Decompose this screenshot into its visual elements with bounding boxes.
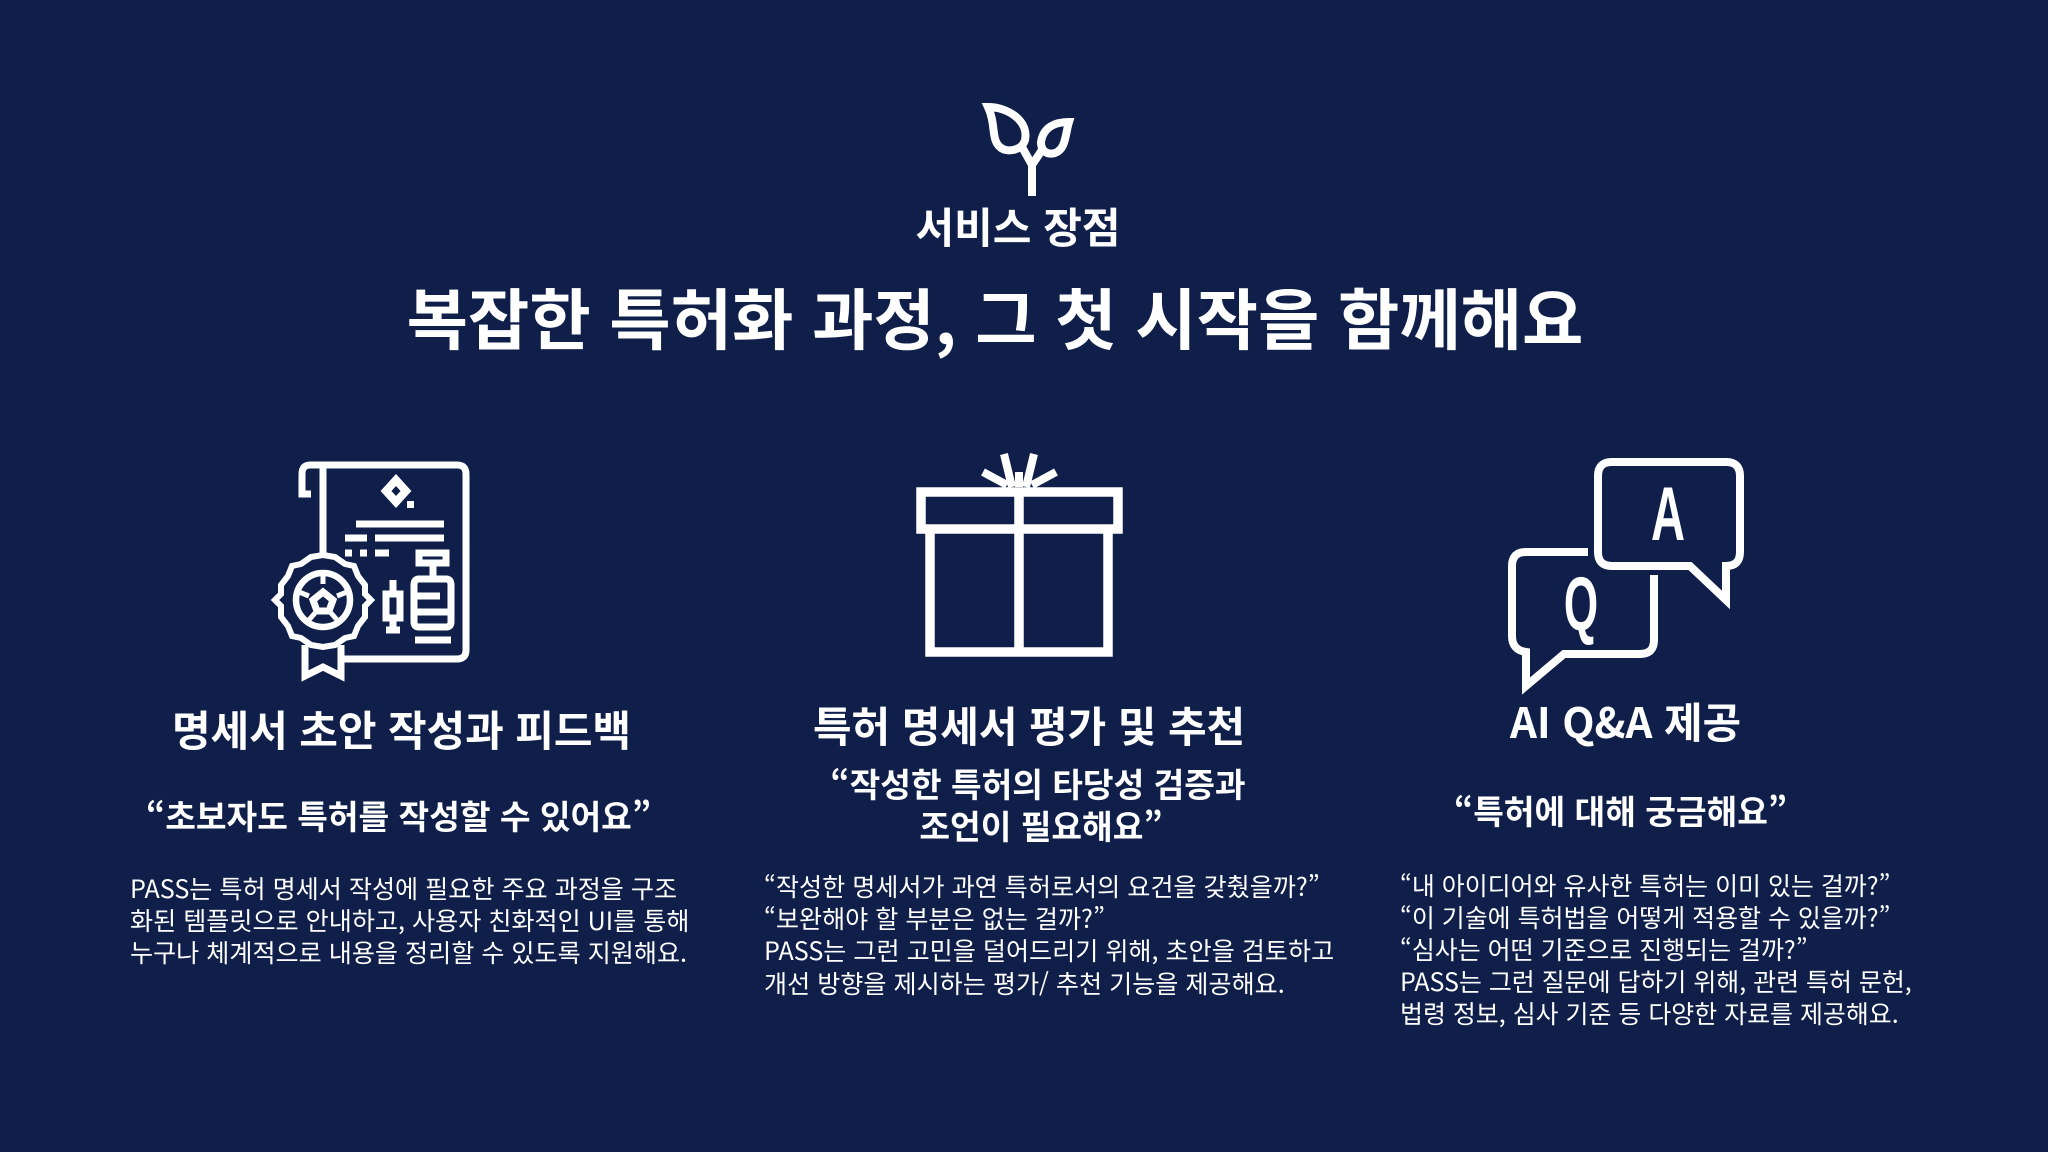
body text: evaluation: 개선 방향을 제시하는 평가/ 추천 기능을 제공해요. (764, 965, 1285, 1001)
body text: draft writing: PASS는 특허 명세서 작성에 필요한 주요 과정을 구조 (130, 870, 677, 906)
body text: AI Q&A: “이 기술에 특허법을 어떻게 적용할 수 있을까?” (1400, 899, 1890, 935)
quote: AI Q&A: “특허에 대해 궁금해요” (1454, 785, 1787, 834)
quote: draft writing: “초보자도 특허를 작성할 수 있어요” (146, 790, 651, 839)
quote: evaluation: 조언이 필요해요” (919, 800, 1163, 849)
icon: Q and A speech bubbles: Q (1564, 563, 1598, 647)
icon: sprout (982, 103, 1074, 196)
body text: AI Q&A: “내 아이디어와 유사한 특허는 이미 있는 걸까?” (1400, 867, 1890, 903)
body text: draft writing (130, 870, 689, 970)
panel: draft writing (130, 462, 689, 970)
heading: AI Q&A: AI Q&A 제공 (1510, 690, 1741, 751)
body text: AI Q&A: 법령 정보, 심사 기준 등 다양한 자료를 제공해요. (1400, 995, 1899, 1031)
icon: Q and A speech bubbles: A (1651, 473, 1685, 557)
body text: draft writing: 누구나 체계적으로 내용을 정리할 수 있도록 지원해요. (130, 934, 687, 970)
body text: evaluation (764, 868, 1334, 1001)
panel: AI Q&A (1400, 458, 1912, 1031)
eyebrow heading: 서비스 장점 (916, 195, 1120, 256)
quote: evaluation (830, 758, 1246, 849)
body text: AI Q&A: “심사는 어떤 기준으로 진행되는 걸까?” (1400, 931, 1808, 967)
panel: evaluation and recommendation (764, 453, 1334, 1001)
body text: evaluation: “보완해야 할 부분은 없는 걸까?” (764, 900, 1105, 936)
heading: draft writing: 명세서 초안 작성과 피드백 (172, 698, 631, 759)
body text: AI Q&A (1400, 867, 1912, 1031)
body text: evaluation: PASS는 그런 고민을 덜어드리기 위해, 초안을 검토하고 (764, 932, 1334, 968)
heading: evaluation: 특허 명세서 평가 및 추천 (813, 694, 1245, 755)
quote: evaluation: “작성한 특허의 타당성 검증과 (830, 758, 1246, 807)
body text: draft writing: 화된 템플릿으로 안내하고, 사용자 친화적인 UI를 통해 (130, 902, 689, 938)
title: 복잡한 특허화 과정, 그 첫 시작을 함께해요 (407, 268, 1583, 364)
body text: AI Q&A: PASS는 그런 질문에 답하기 위해, 관련 특허 문헌, (1400, 963, 1912, 999)
body text: evaluation: “작성한 명세서가 과연 특허로서의 요건을 갖췄을까?” (764, 868, 1320, 904)
